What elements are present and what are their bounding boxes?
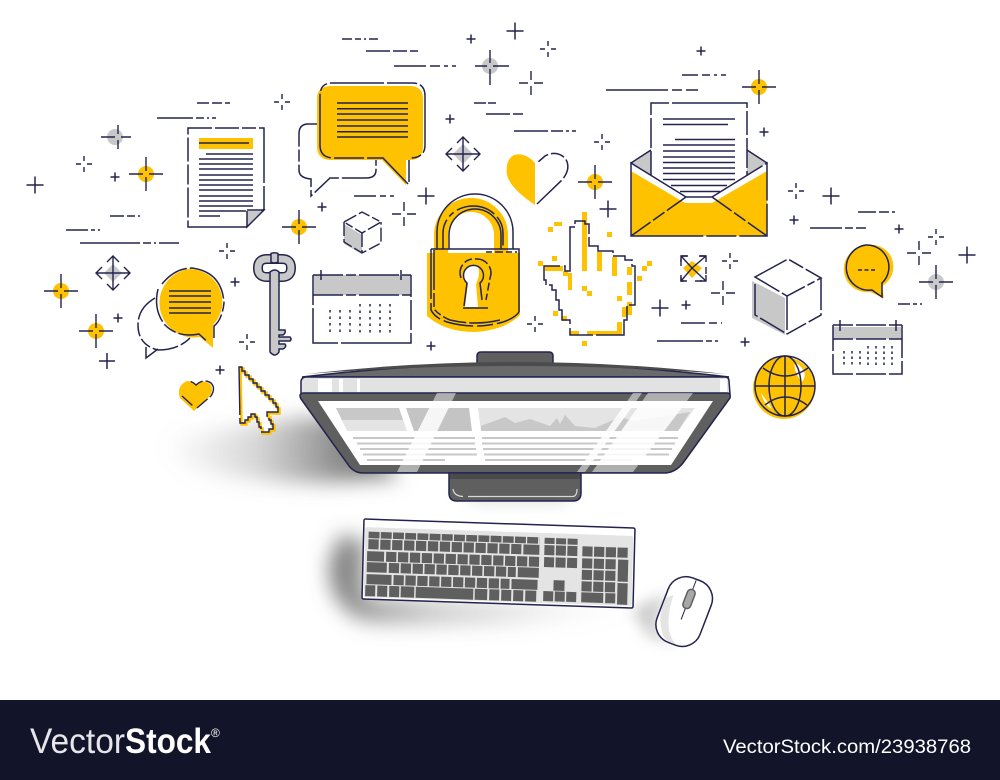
icon: left move arrows (96, 256, 130, 290)
mouse (650, 571, 718, 652)
mouse body (650, 571, 718, 652)
icon: calendar centre (313, 270, 411, 343)
icon: left speech bubbles (138, 268, 224, 358)
monitor bezel (300, 393, 730, 473)
decorative dash lines (66, 39, 922, 341)
icon: yellow speech bubbles (299, 83, 425, 196)
icon: pixel arrow cursor (239, 367, 280, 434)
keys (365, 535, 629, 605)
logo bold part: Stock (125, 722, 211, 761)
mouse centre line (681, 580, 696, 619)
yellow dot targets (44, 50, 953, 348)
image id: VectorStock.com/23938768 (723, 737, 971, 758)
screen reflections (397, 393, 693, 472)
mouse side shade (651, 593, 692, 645)
icon: frame arrows yellow (681, 256, 706, 281)
icon: big cube (752, 259, 821, 335)
screen panels (336, 408, 695, 460)
footer bar (0, 700, 1000, 780)
sparkle marks (76, 41, 944, 350)
keyboard (362, 519, 635, 608)
computer monitor (300, 352, 730, 501)
keyboard tray (364, 527, 633, 606)
icon: document (188, 128, 264, 227)
icon: small speech bubble (844, 245, 893, 298)
icon: globe (753, 356, 815, 419)
monitor top edge (302, 364, 729, 377)
mouse wheel (682, 588, 696, 610)
icon: small cube (344, 212, 381, 254)
monitor screen (318, 401, 713, 465)
monitor top stand (477, 352, 553, 366)
icon: small heart (179, 381, 214, 411)
keyboard body (362, 519, 635, 608)
monitor front band (301, 377, 730, 394)
drop shadows under computer (165, 418, 678, 645)
icon: pixel hand cursor (538, 212, 652, 346)
registered mark: ® (211, 726, 220, 740)
icon: key (258, 253, 291, 355)
reflections inside screen (402, 408, 682, 461)
icon: calendar right (833, 320, 902, 374)
icon: padlock (427, 194, 520, 332)
icon: move arrows top (446, 137, 480, 171)
icon: envelope with letter (631, 103, 767, 236)
monitor top edge shade (306, 362, 725, 374)
band highlights (318, 379, 727, 392)
logo: Vector (30, 722, 125, 761)
icon: half yellow heart (507, 153, 568, 205)
monitor lower stand (449, 473, 581, 501)
plus marks (26, 22, 976, 374)
